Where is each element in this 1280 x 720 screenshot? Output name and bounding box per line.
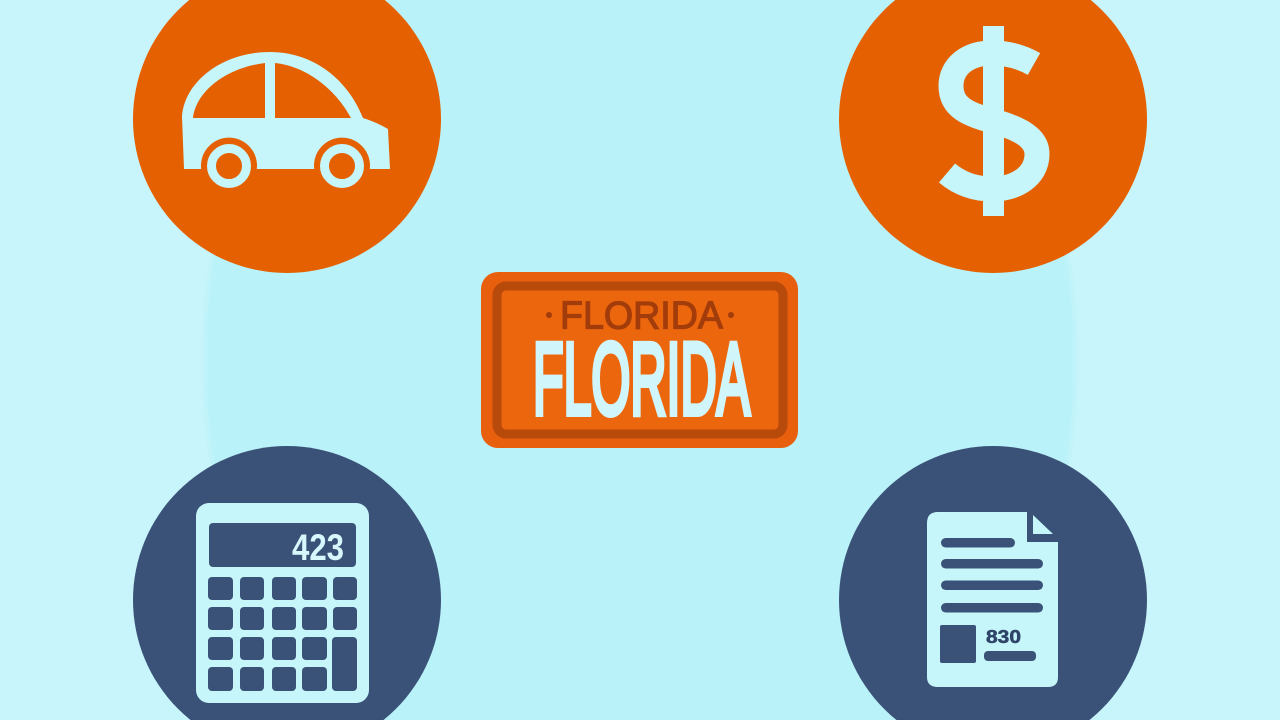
license plate bbox=[481, 272, 798, 448]
icon: document in navy circle bbox=[839, 446, 1147, 720]
background glow bbox=[205, 0, 1075, 720]
icon: dollar sign in orange circle bbox=[839, 0, 1147, 273]
license plate: FLORIDA bbox=[533, 322, 750, 436]
plate small heading: FLORIDA bbox=[560, 294, 723, 338]
icon: car in orange circle bbox=[133, 0, 441, 273]
calculator keys bbox=[208, 577, 357, 691]
document number: 830 bbox=[986, 627, 1021, 647]
calculator display number: 423 bbox=[292, 527, 344, 568]
icon: calculator in navy circle bbox=[133, 446, 441, 720]
